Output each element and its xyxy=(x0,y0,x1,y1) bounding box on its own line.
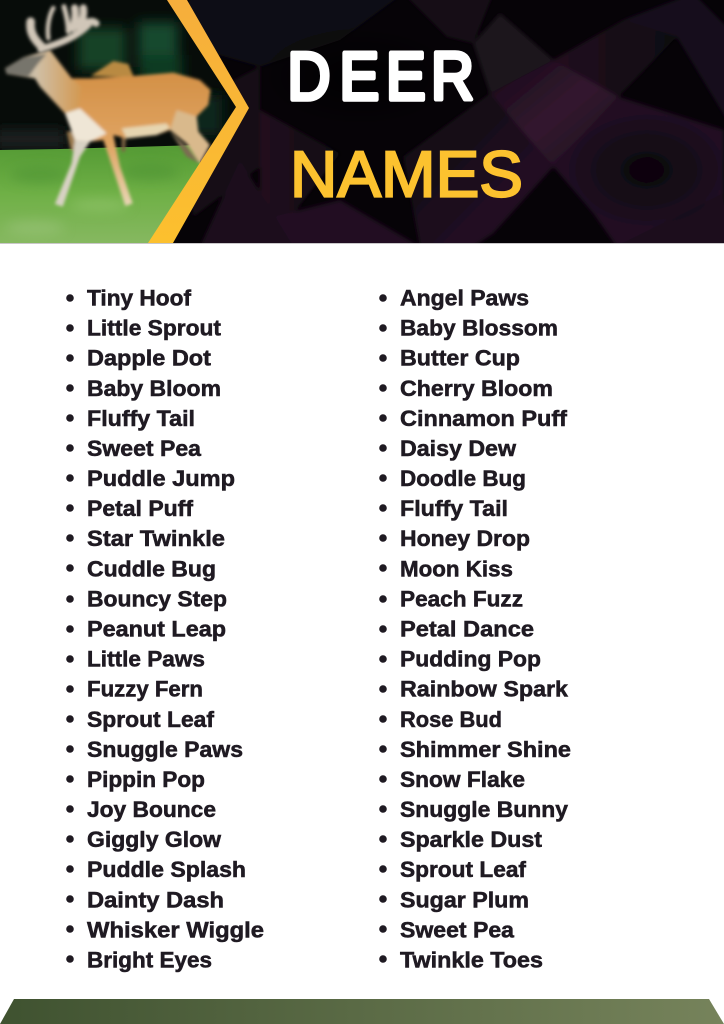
gold chevron xyxy=(148,0,249,243)
name: Fuzzy Fern xyxy=(87,677,203,702)
name: Baby Blossom xyxy=(400,316,558,341)
name: Cherry Bloom xyxy=(400,376,553,401)
name: Bright Eyes xyxy=(87,948,212,972)
name: Butter Cup xyxy=(400,346,520,371)
header bottom edge xyxy=(0,243,724,244)
name: Sprout Leaf xyxy=(400,857,526,882)
name: Fluffy Tail xyxy=(87,406,195,431)
title: DEER: DEER xyxy=(288,38,474,114)
name list: left column xyxy=(66,286,264,972)
name: Pippin Pop xyxy=(87,767,205,792)
name: Pudding Pop xyxy=(400,647,541,672)
antlers xyxy=(30,7,96,49)
name: Shimmer Shine xyxy=(400,737,571,762)
name: Tiny Hoof xyxy=(87,286,192,310)
name: Baby Bloom xyxy=(87,376,221,401)
name: Twinkle Toes xyxy=(400,948,543,972)
name: Sparkle Dust xyxy=(400,827,543,852)
name: Snuggle Paws xyxy=(87,737,243,762)
name: Bouncy Step xyxy=(87,586,227,611)
name: Snow Flake xyxy=(400,767,525,792)
name: Little Sprout xyxy=(87,316,222,341)
name: Moon Kiss xyxy=(400,556,513,581)
name: Petal Puff xyxy=(87,496,194,521)
name: Honey Drop xyxy=(400,526,530,551)
name: Star Twinkle xyxy=(87,526,225,551)
name: Cinnamon Puff xyxy=(400,406,568,431)
name: Sugar Plum xyxy=(400,887,529,912)
name: Sweet Pea xyxy=(400,917,514,942)
footer band xyxy=(0,999,724,1024)
deer photograph xyxy=(0,0,250,243)
name: Snuggle Bunny xyxy=(400,797,568,822)
name: Sprout Leaf xyxy=(87,707,215,732)
name: Petal Dance xyxy=(400,616,534,642)
name: Doodle Bug xyxy=(400,466,526,491)
name: Rose Bud xyxy=(400,707,502,732)
name: Puddle Jump xyxy=(87,466,235,491)
grass xyxy=(0,145,200,243)
name list: right column xyxy=(379,286,571,972)
name: Fluffy Tail xyxy=(400,496,508,521)
shadow band at tree line xyxy=(0,130,65,148)
name: Dainty Dash xyxy=(87,887,224,912)
name: Dapple Dot xyxy=(87,346,212,371)
name: Little Paws xyxy=(87,647,205,672)
name: Joy Bounce xyxy=(87,797,216,822)
name: Rainbow Spark xyxy=(400,677,568,702)
name: Puddle Splash xyxy=(87,857,246,882)
forest background xyxy=(78,22,222,135)
name: Giggly Glow xyxy=(87,827,221,852)
name: Sweet Pea xyxy=(87,436,201,461)
name: Peanut Leap xyxy=(87,616,226,642)
title: NAMES: NAMES xyxy=(290,138,523,211)
name: Cuddle Bug xyxy=(87,556,216,581)
name: Angel Paws xyxy=(400,286,529,310)
header banner background xyxy=(173,0,724,243)
name: Daisy Dew xyxy=(400,436,517,461)
deer xyxy=(5,7,211,207)
name: Peach Fuzz xyxy=(400,586,523,611)
name: Whisker Wiggle xyxy=(87,917,264,942)
